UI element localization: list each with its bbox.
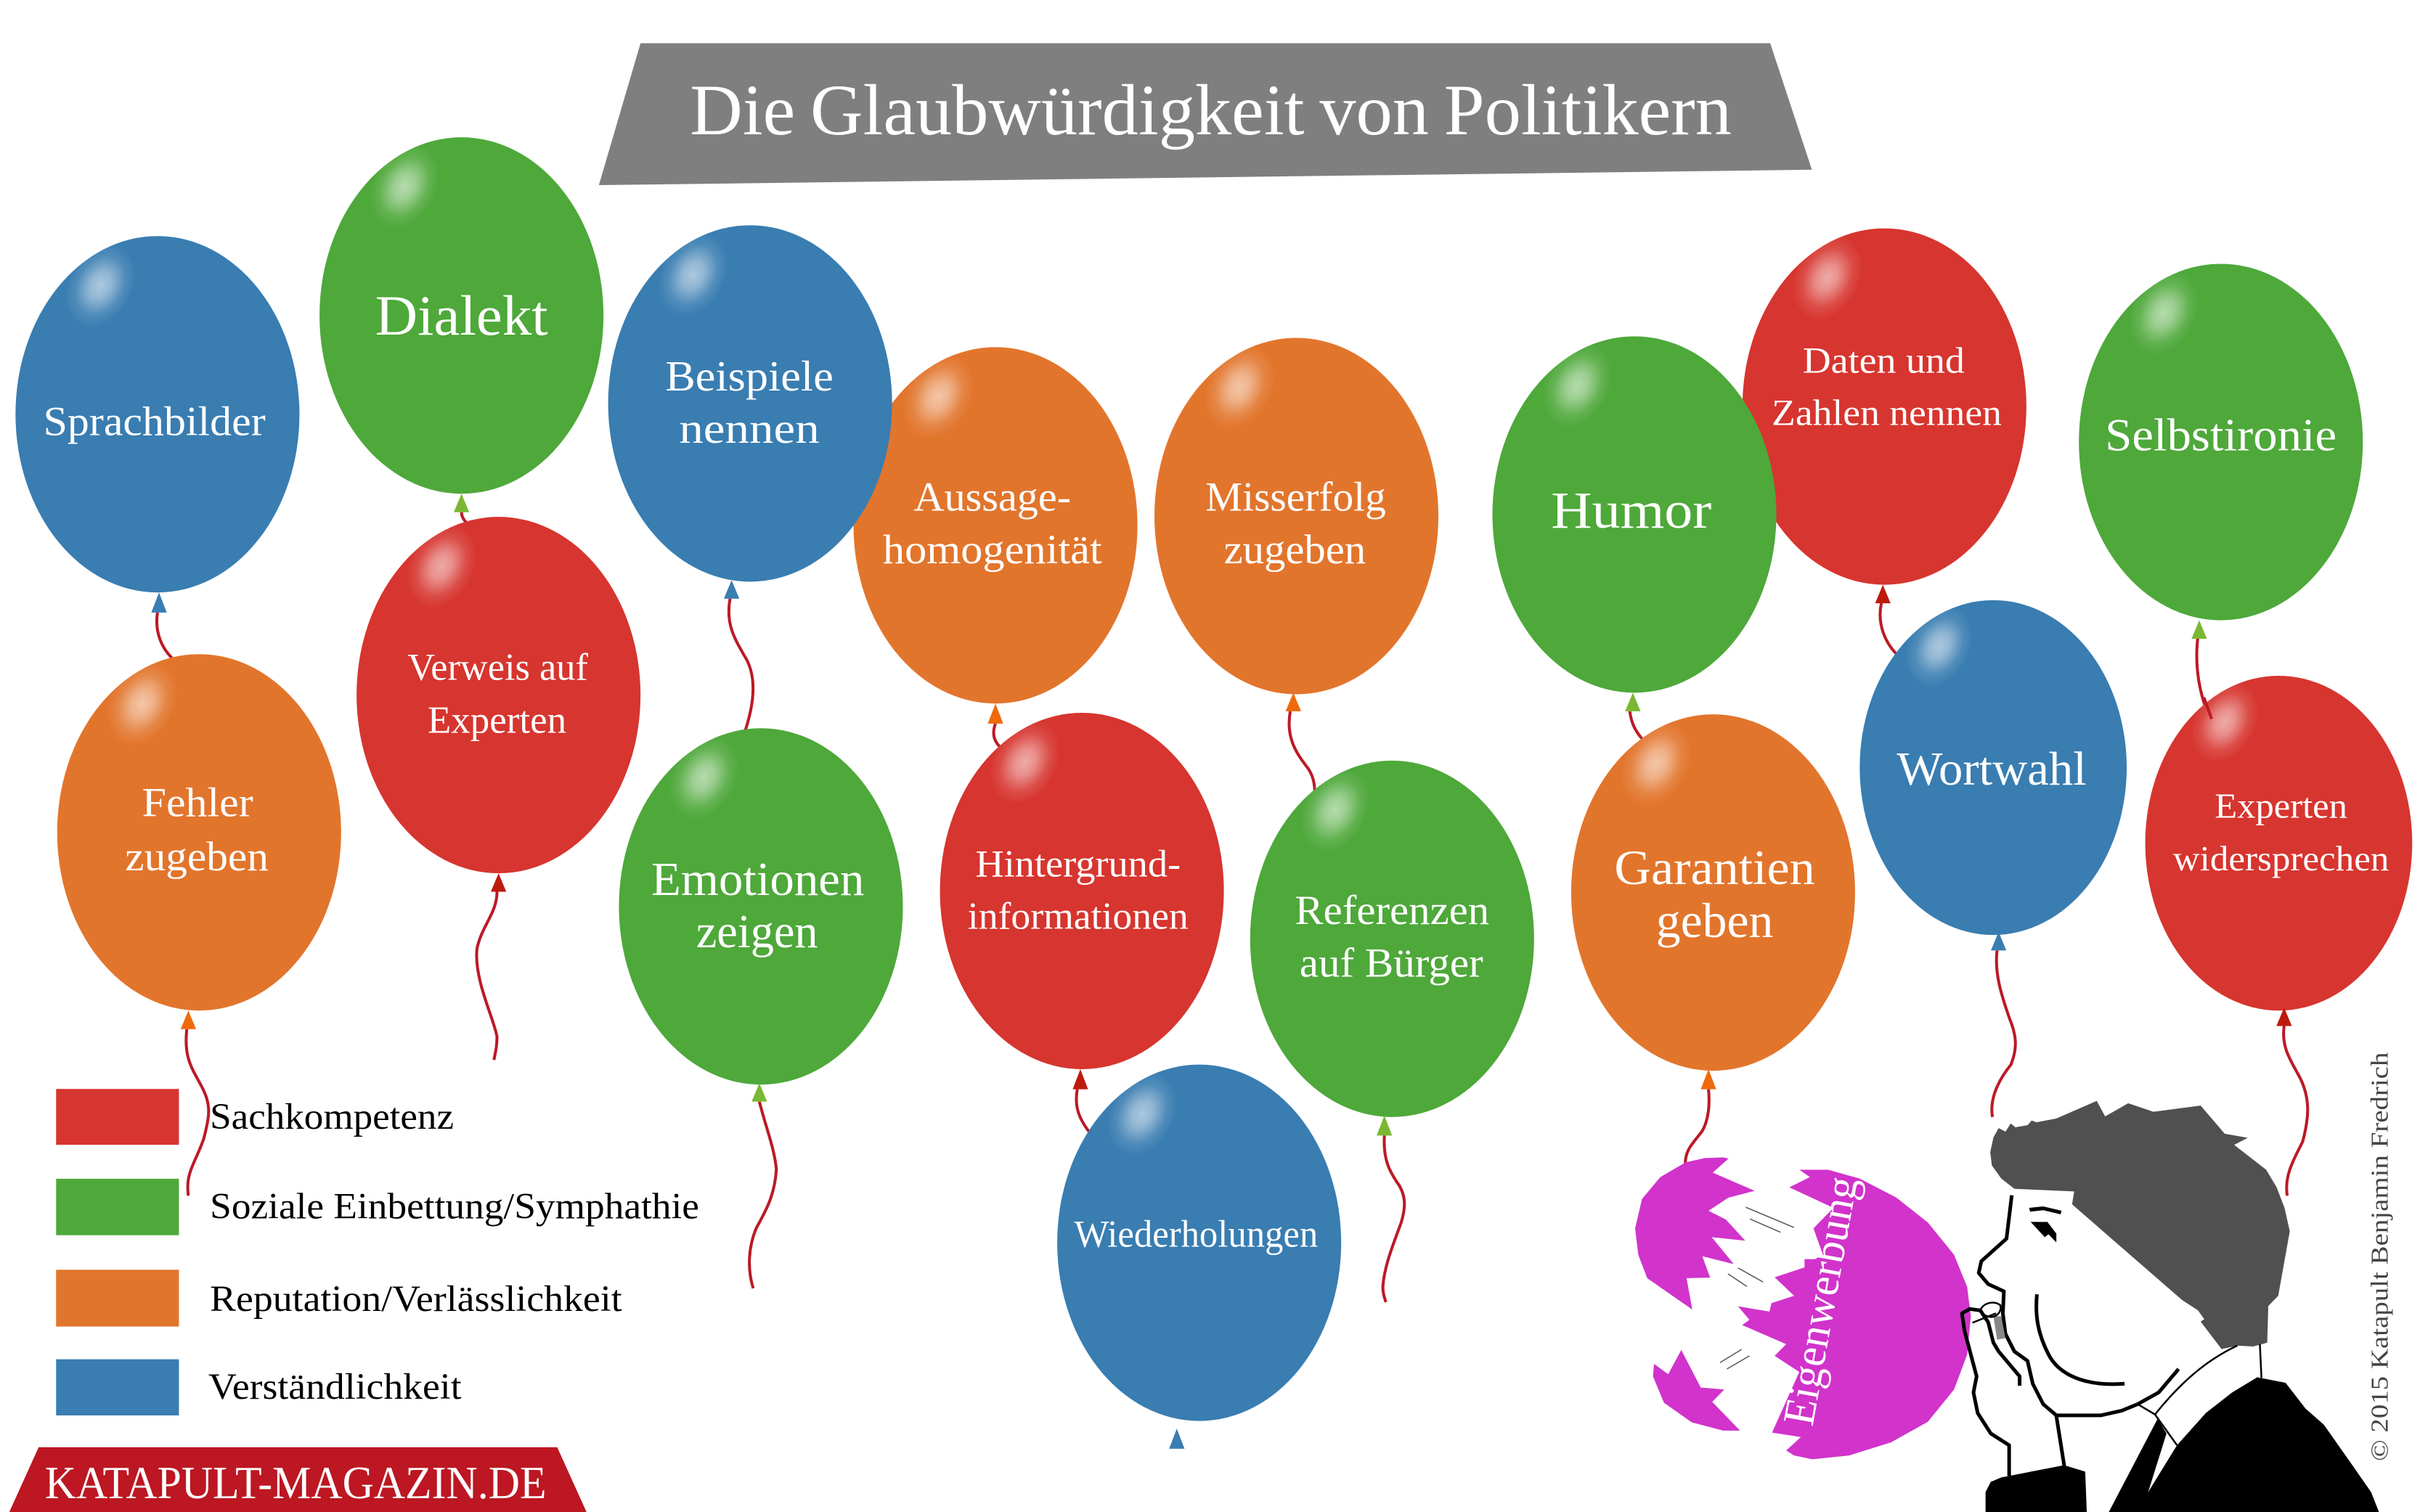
balloon: Selbstironie: [2079, 258, 2363, 719]
illustration: bursting balloon Eigenwerbung: Eigenwerbung: [1774, 1173, 1867, 1429]
balloon: Wiederholungen: [1057, 1059, 1341, 1449]
balloon: Selbstironie: Selbstironie: [2105, 409, 2337, 461]
eyebrow: [2029, 1206, 2061, 1214]
balloon: Aussagehomogenität: [854, 342, 1138, 750]
balloon: Daten und Zahlen nennen: [1743, 223, 2026, 657]
sleeve: [1986, 1465, 2087, 1512]
title banner: [599, 44, 1812, 185]
balloon: Humor: Humor: [1551, 481, 1711, 539]
eye: [2031, 1222, 2056, 1243]
balloon: Verweis auf Experten: [357, 512, 640, 1060]
balloon: Misserfolg zugeben: [1154, 332, 1438, 796]
balloon: Dialekt: [319, 132, 603, 528]
balloon: Hintergrundinformationen: Hintergrund-: [975, 843, 1181, 885]
banner: KATAPULT-MAGAZIN.DE: KATAPULT-MAGAZIN.DE: [45, 1457, 547, 1508]
balloon: Emotionen zeigen: zeigen: [696, 905, 818, 958]
neck and collar: [2056, 1416, 2064, 1466]
legend item: Reputation/Verlässlichkeit: [56, 1270, 622, 1327]
balloon: Aussagehomogenität: homogenität: [883, 527, 1102, 573]
balloon: Experten widersprechen: widersprechen: [2173, 838, 2389, 878]
collar thin lines: [2138, 1344, 2262, 1445]
balloon: Misserfolg zugeben: Misserfolg: [1205, 475, 1386, 520]
illustration: bursting balloon Eigenwerbung: [1635, 1158, 1971, 1459]
balloon: Humor: [1492, 331, 1777, 742]
balloon: Hintergrundinformationen: informationen: [968, 896, 1189, 938]
balloon: Garantien geben: Garantien: [1614, 840, 1815, 895]
hair: [1990, 1101, 2290, 1349]
legend item: Soziale Einbettung/Symphathie: Soziale Einbettung/Symphathie: [210, 1187, 699, 1227]
balloon: Fehler zugeben: zugeben: [125, 834, 269, 880]
balloon: Emotionen zeigen: Emotionen: [651, 853, 864, 906]
smile line: [2037, 1294, 2124, 1384]
illustration: politician blowing: [1962, 1101, 2379, 1512]
balloon: Verweis auf Experten: Verweis auf: [407, 646, 588, 688]
balloon: Referenzen auf Bürger: auf Bürger: [1300, 940, 1483, 986]
balloon: Hintergrundinformationen: [940, 708, 1224, 1132]
balloon: Garantien geben: geben: [1656, 893, 1773, 948]
legend: [56, 1089, 699, 1415]
legend item: Sachkompetenz: Sachkompetenz: [210, 1097, 454, 1137]
face outline: [1979, 1196, 2178, 1415]
balloon: Sprachbilder: Sprachbilder: [44, 399, 266, 444]
balloon: Emotionen zeigen: [619, 723, 903, 1288]
copyright: © 2015 Katapult Benjamin Fredrich: [2366, 1053, 2393, 1461]
balloon: Beispiele nennen: Beispiele: [665, 352, 834, 400]
balloon: Aussagehomogenität: Aussage-: [913, 475, 1071, 520]
thumb: [1973, 1303, 2000, 1323]
balloon: Sprachbilder: [15, 231, 299, 661]
legend item: Verständlichkeit: [56, 1360, 462, 1415]
title banner: Die Glaubwürdigkeit von Politikern: [690, 70, 1732, 150]
balloon: Misserfolg zugeben: zugeben: [1224, 527, 1366, 573]
legend item: Sachkompetenz: [56, 1089, 454, 1145]
balloon: Beispiele nennen: [608, 220, 892, 735]
balloon: Garantien geben: [1571, 709, 1855, 1164]
balloon: Wiederholungen: Wiederholungen: [1074, 1213, 1318, 1255]
balloon: Daten und Zahlen nennen: Daten und: [1803, 340, 1965, 381]
balloon: Beispiele nennen: nennen: [679, 404, 820, 452]
legend item: Reputation/Verlässlichkeit: Reputation/Verlässlichkeit: [210, 1279, 622, 1320]
balloon: Referenzen auf Bürger: Referenzen: [1295, 888, 1489, 933]
balloon: Dialekt: Dialekt: [375, 285, 548, 348]
balloon: Wortwahl: [1859, 594, 2127, 1117]
legend item: Verständlichkeit: Verständlichkeit: [208, 1367, 462, 1407]
balloon: Experten widersprechen: [2146, 669, 2412, 1196]
jacket: [2109, 1377, 2379, 1512]
balloon: Referenzen auf Bürger: [1250, 756, 1534, 1302]
hand: [1962, 1309, 2020, 1476]
balloon: Experten widersprechen: Experten: [2215, 786, 2347, 826]
balloon: Fehler zugeben: [57, 649, 341, 1196]
legend item: Soziale Einbettung/Symphathie: [56, 1179, 699, 1235]
balloon: Wortwahl: Wortwahl: [1897, 743, 2087, 796]
whistle mouthpiece: [1993, 1316, 2005, 1340]
balloon: Verweis auf Experten: Experten: [428, 700, 566, 742]
balloon: Fehler zugeben: Fehler: [142, 780, 253, 825]
balloon: Daten und Zahlen nennen: Zahlen nennen: [1772, 393, 2002, 434]
